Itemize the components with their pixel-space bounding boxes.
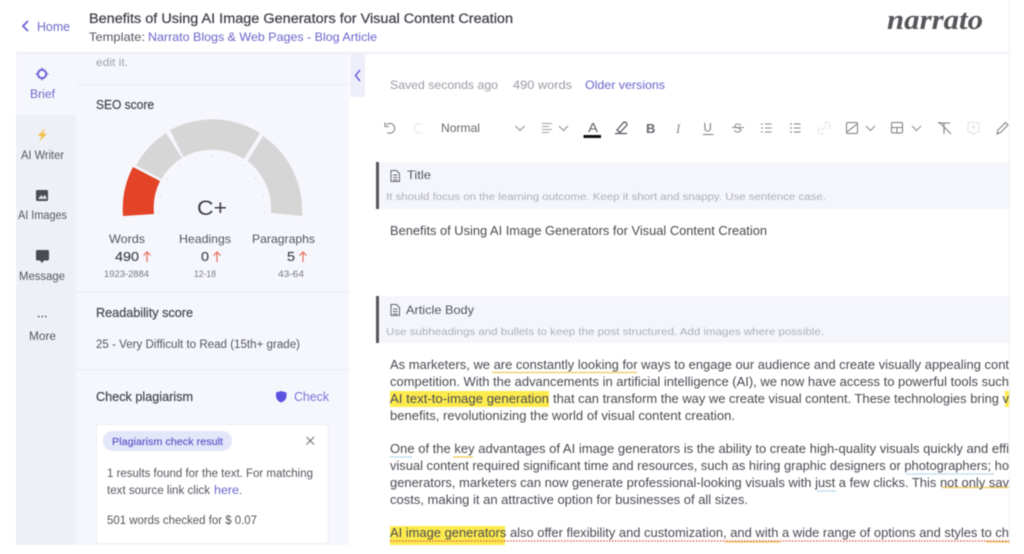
result text: 1 results found for the text. For matching [107, 468, 313, 480]
home link: Home [37, 20, 70, 34]
clipped helper text: edit it. [96, 57, 128, 69]
nav: More: More [29, 331, 56, 343]
document icon [391, 170, 400, 182]
document icon [391, 304, 400, 316]
heading: SEO score: SEO score [96, 98, 154, 112]
article paragraphs: visual content required significant time and resources, such as hiring graphic designers or photographers; ho [390, 459, 1009, 473]
article paragraphs: generators, marketers can now generate professional-looking visuals with just a few clicks. This not only sav [390, 476, 1010, 490]
stat: paragraphs: 5 [287, 249, 295, 264]
article paragraphs [390, 358, 1010, 540]
SEO gauge [123, 119, 302, 220]
editor toolbar: B [646, 121, 655, 136]
stat: paragraphs: Paragraphs [252, 232, 315, 246]
stat: paragraphs [252, 232, 315, 280]
stat: paragraphs: 43-64 [278, 269, 304, 280]
editor toolbar: I [675, 121, 681, 136]
collapse tab [350, 54, 365, 97]
result pill: Plagiarism check result [112, 436, 223, 448]
result text: 501 words checked for $ 0.07 [107, 515, 257, 527]
nav: Brief [30, 68, 56, 101]
document title: Benefits of Using AI Image Generators for Visual Content Creation [89, 11, 513, 26]
result pill [103, 431, 232, 451]
plagiarism result card [96, 424, 328, 544]
heading: check plagiarism: Check plagiarism [96, 390, 193, 404]
result text [107, 468, 313, 527]
logo: narrato: narrato [887, 4, 983, 36]
article paragraphs: that can transform the way we create visual content. These technologies bring v [553, 392, 1010, 406]
title content: Benefits of Using AI Image Generators for Visual Content Creation [390, 224, 767, 238]
stat: words: 490 [115, 249, 139, 264]
close icon [306, 437, 314, 444]
save status row: Saved seconds ago [390, 78, 498, 92]
Title block: It should focus on the learning outcome. Keep it short and snappy. Use sentence case. [386, 191, 826, 203]
stat: headings [179, 232, 231, 280]
Article Body block: Use subheadings and bullets to keep the post structured. Add images where possible. [386, 326, 824, 338]
grammar and spelling underlines [390, 372, 1009, 542]
article paragraphs: competition. With the advancements in artificial intelligence (AI), we now have access to powerful tools such [390, 375, 1009, 389]
save status row: Older versions [585, 78, 665, 92]
result text: . [239, 485, 242, 497]
template line: Template: [89, 30, 145, 44]
editor toolbar: U [704, 122, 712, 134]
save status row: 490 words [513, 78, 572, 92]
nav: AI Images: AI Images [18, 210, 67, 222]
article paragraphs: AI text-to-image generation [390, 392, 549, 406]
editor toolbar: Normal [441, 121, 480, 135]
article paragraphs: One of the key advantages of AI image generators is the ability to create high-quality visuals quickly and effi [390, 442, 1009, 456]
result text: text source link click [107, 485, 210, 497]
editor toolbar: A [588, 121, 599, 135]
stat: headings: 0 [201, 249, 209, 264]
editor toolbar: S [734, 122, 742, 136]
Article Body block [376, 296, 1009, 343]
article text [390, 358, 1010, 545]
stat: words: 1923-2884 [104, 269, 149, 280]
stat: headings: Headings [179, 232, 231, 246]
nav: AI Images [18, 190, 67, 222]
article paragraphs: AI image generators also offer flexibility and customization, and with a wide range of options and styles to ch [390, 526, 1009, 540]
article paragraphs: As marketers, we are constantly looking for ways to engage our audience and create visually appealing cont [390, 358, 1010, 372]
gauge grade: C+ [197, 197, 227, 220]
left panel [76, 54, 349, 545]
stat: headings: 12-18 [194, 269, 216, 280]
top header bar [0, 0, 1009, 54]
template line: Narrato Blogs & Web Pages - Blog Article [148, 30, 377, 44]
nav: Brief: Brief [30, 89, 56, 101]
result text: here [214, 485, 239, 497]
check button [276, 390, 330, 404]
check button: Check [294, 390, 330, 404]
article paragraphs: costs, making it an attractive option for businesses of all sizes. [390, 493, 748, 507]
editor toolbar [385, 121, 1008, 138]
nav: Message: Message [19, 271, 65, 283]
article paragraphs: benefits, revolutionizing the world of visual content creation. [390, 409, 735, 423]
home link [23, 20, 70, 34]
stat: words [104, 232, 150, 280]
nav: More [29, 316, 56, 343]
Title block [376, 162, 1009, 209]
keyword highlights [390, 391, 1009, 545]
heading: readability score: Readability score [96, 306, 193, 320]
nav: AI Writer: AI Writer [21, 150, 64, 162]
Title block: Title [407, 168, 431, 182]
Article Body block: Article Body [406, 303, 474, 317]
save status row [390, 78, 665, 92]
nav: AI Writer [21, 128, 64, 162]
stat: words: Words [109, 232, 145, 246]
left navigation rail [16, 54, 76, 545]
readability value: 25 - Very Difficult to Read (15th+ grade) [96, 339, 300, 351]
nav: Message [19, 250, 65, 283]
